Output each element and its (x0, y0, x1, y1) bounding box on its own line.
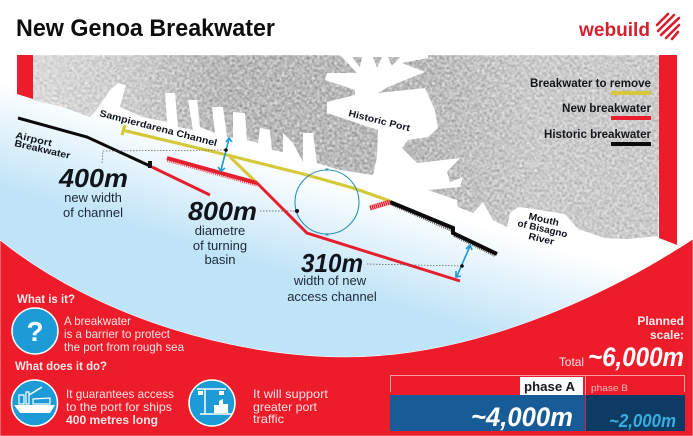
map label: Historic Port: Historic Port (347, 108, 412, 134)
legend: Historic breakwater (544, 129, 652, 141)
text: greater port traffic: It will support (253, 387, 329, 401)
map label: Mouth of Bisagno River: River (527, 231, 555, 248)
scale bracket (390, 376, 684, 395)
heading: Planned scale (637, 314, 684, 342)
map label: Airport Breakwater: Breakwater (13, 138, 72, 162)
logo: webuild: webuild (578, 20, 650, 41)
left red strip (17, 55, 33, 99)
icon: ship (12, 380, 58, 426)
callout: 800m (188, 196, 257, 267)
legend: New breakwater (562, 103, 652, 115)
phase B label: phase B (591, 383, 628, 394)
phase A bar: ~4,000m (471, 402, 573, 432)
callout: 310m: width of new (293, 273, 367, 288)
text: what is it: is a barrier to protect (64, 327, 171, 341)
white header band (0, 0, 693, 55)
text: guarantees access (66, 387, 174, 427)
callout: 310m (287, 248, 377, 304)
icon: crane (189, 380, 235, 426)
text: guarantees access: 400 metres long (66, 413, 158, 427)
heading: What does it do?: What does it do? (15, 359, 107, 373)
text: guarantees access: It guarantees access (66, 387, 174, 401)
callout: 310m: access channel (287, 289, 377, 304)
aerial map of the port (30, 55, 662, 245)
callout: 400m: new width (64, 190, 122, 205)
icon: question mark (12, 308, 58, 354)
phase A label: phase A (524, 379, 576, 394)
text: what is it (64, 314, 184, 354)
text: greater port traffic: greater port (253, 400, 318, 414)
map label: Airport Breakwater: Airport (14, 130, 54, 149)
total length: Total (559, 355, 584, 369)
callout: 800m: 800m (188, 196, 257, 226)
heading: Planned scale: Planned (637, 314, 684, 328)
text: greater port traffic: traffic (253, 412, 284, 426)
map label: Mouth of Bisagno River: of Bisagno (516, 218, 569, 240)
phase B bar: ~2,000m (609, 411, 676, 431)
red lower panel (0, 239, 693, 436)
turning basin circle (295, 168, 359, 236)
legend (530, 78, 652, 146)
breakwater to remove (yellow line) (122, 125, 390, 201)
heading: What is it?: What is it? (17, 292, 75, 306)
callout: 800m: basin (204, 252, 236, 267)
new breakwater (red line) (152, 158, 460, 281)
callout: 400m: of channel (63, 205, 123, 220)
legend: Breakwater to remove (530, 78, 651, 90)
phase A bar (390, 395, 585, 432)
callout: 800m: of turning (193, 238, 247, 253)
callout: 400m: 400m (58, 163, 128, 193)
map label: Mouth of Bisagno River (516, 211, 569, 248)
map label: Airport Breakwater (13, 130, 72, 162)
icon: question mark: ? (26, 316, 44, 347)
right red strip (659, 55, 677, 245)
leader dots (224, 148, 464, 268)
map label: Sampierdarena Channel: Sampierdarena Channel (98, 108, 218, 149)
width arrow: access channel (456, 245, 472, 277)
heading: Planned scale: scale: (650, 328, 684, 342)
leader lines (102, 150, 462, 266)
callout: 310m: 310m (301, 248, 363, 278)
width arrow: channel (218, 138, 232, 171)
text: guarantees access: to the port for ships (66, 400, 172, 414)
logo: webuild (578, 14, 679, 41)
text: greater port traffic (253, 387, 329, 426)
text: what is it: A breakwater (64, 314, 131, 328)
callout: 400m (58, 163, 128, 220)
phase A label (520, 377, 583, 395)
map label: Mouth of Bisagno River: Mouth (527, 211, 560, 229)
historic breakwater (black line) (18, 118, 497, 256)
text: what is it: the port from rough sea (64, 340, 184, 354)
callout: 800m: diametre (195, 223, 245, 238)
phase B bar (586, 395, 685, 431)
title: New Genoa Breakwater (16, 15, 275, 42)
total length: ~6,000m (588, 342, 684, 372)
